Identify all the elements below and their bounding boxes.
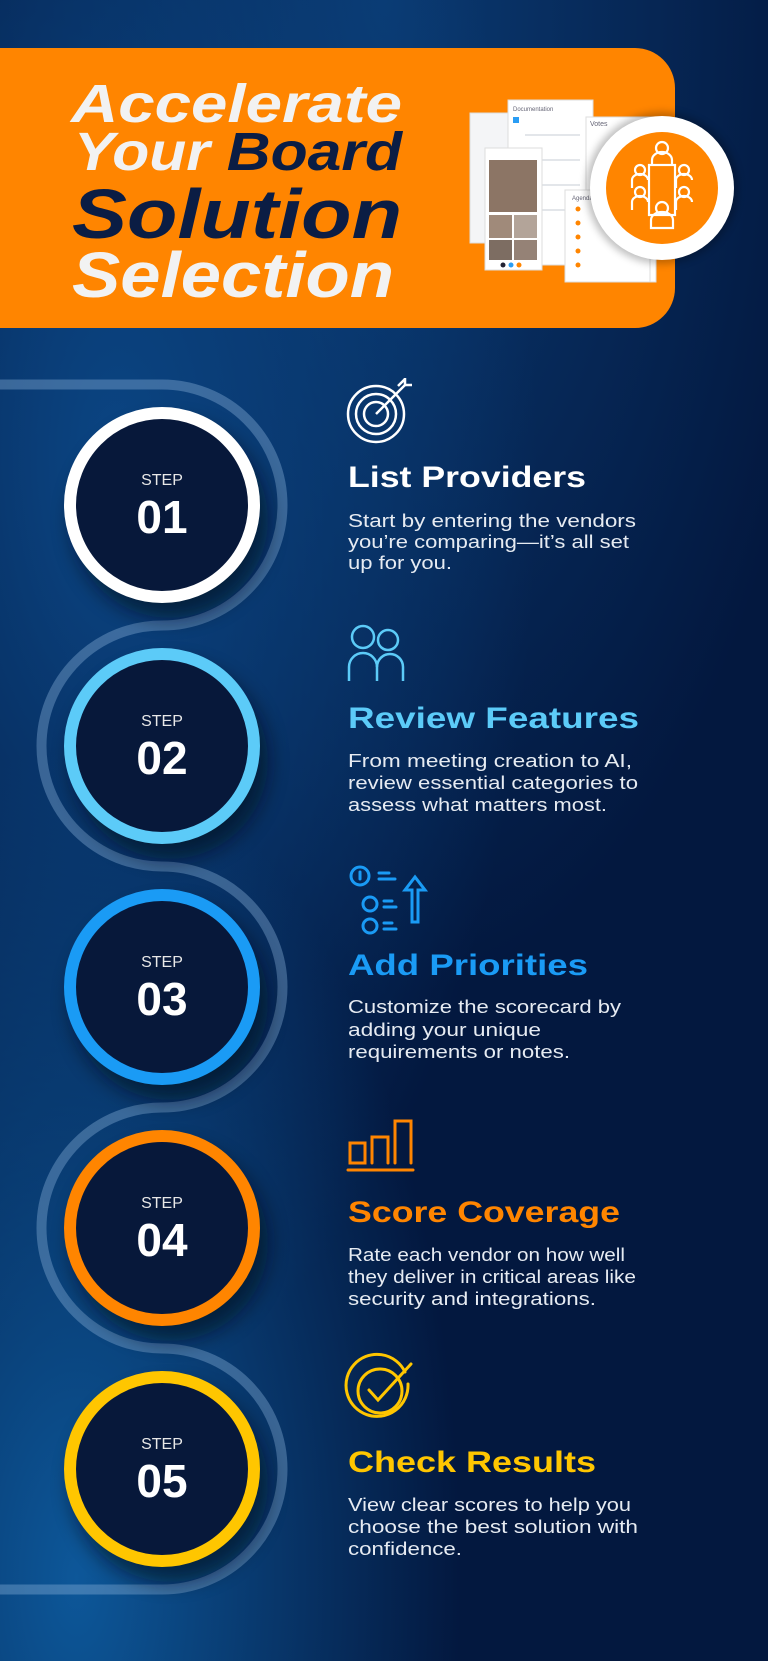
title: Solution [72,175,402,253]
text: step 1: List Providers [348,461,586,494]
step 1 circle: STEP [141,472,183,489]
text: step 5: View clear scores to help you [348,1495,631,1515]
text: step 3: Customize the scorecard by [348,997,621,1017]
step 1 circle [70,413,268,618]
icon: boardroom circle [586,112,738,264]
text: step 4 [348,1196,636,1309]
text: step 1 [348,461,636,573]
title: Your Board [74,122,403,182]
serpentine track [0,384,283,1590]
step 4 circle [70,1136,268,1341]
text: step 4: security and integrations. [348,1289,596,1309]
icon: priorities list [351,867,425,933]
step 3 circle: STEP [141,954,183,971]
text: step 2 [348,702,639,815]
title [69,74,403,311]
title: Accelerate [69,74,402,134]
text: step 1: up for you. [348,553,452,573]
step 2 circle: STEP [141,713,183,730]
text: step 5 [348,1446,638,1559]
text: step 3: Add Priorities [348,949,588,982]
text: step 5: confidence. [348,1539,462,1559]
text: step 5: Check Results [348,1446,596,1479]
text: step 5: choose the best solution with [348,1517,638,1537]
icon: target [348,378,412,442]
step 1 circle: 01 [136,491,188,543]
text: step 4: Score Coverage [348,1196,620,1229]
app mockup [470,100,656,282]
text: step 2: assess what matters most. [348,795,607,815]
text: step 4: they deliver in critical areas like [348,1267,636,1287]
text: step 4: Rate each vendor on how well [348,1245,625,1265]
text: step 3: adding your unique [348,1020,541,1040]
text: step 2: From meeting creation to AI, [348,751,632,771]
app mockup: Agenda [572,196,593,202]
text: step 1: you’re comparing—it’s all set [348,532,629,552]
app mockup: Documentation [513,107,553,113]
step 5 circle [70,1377,268,1582]
text: step 3 [348,949,621,1062]
step 2 circle: 02 [136,732,188,784]
step 5 circle: 05 [136,1455,188,1507]
step 3 circle [70,895,268,1100]
text: step 2: Review Features [348,702,639,735]
step 3 circle: 03 [136,973,188,1025]
step 4 circle: 04 [136,1214,188,1266]
step 2 circle [70,654,268,859]
text: step 3: requirements or notes. [348,1042,570,1062]
header banner [0,48,738,328]
app mockup: Votes [590,121,608,128]
step 5 circle: STEP [141,1436,183,1453]
text: step 2: review essential categories to [348,773,638,793]
title: Selection [72,239,394,311]
icon: bar chart [348,1121,413,1170]
icon: people [349,626,403,681]
step 4 circle: STEP [141,1195,183,1212]
icon: check circle [346,1354,411,1416]
text: step 1: Start by entering the vendors [348,511,636,531]
